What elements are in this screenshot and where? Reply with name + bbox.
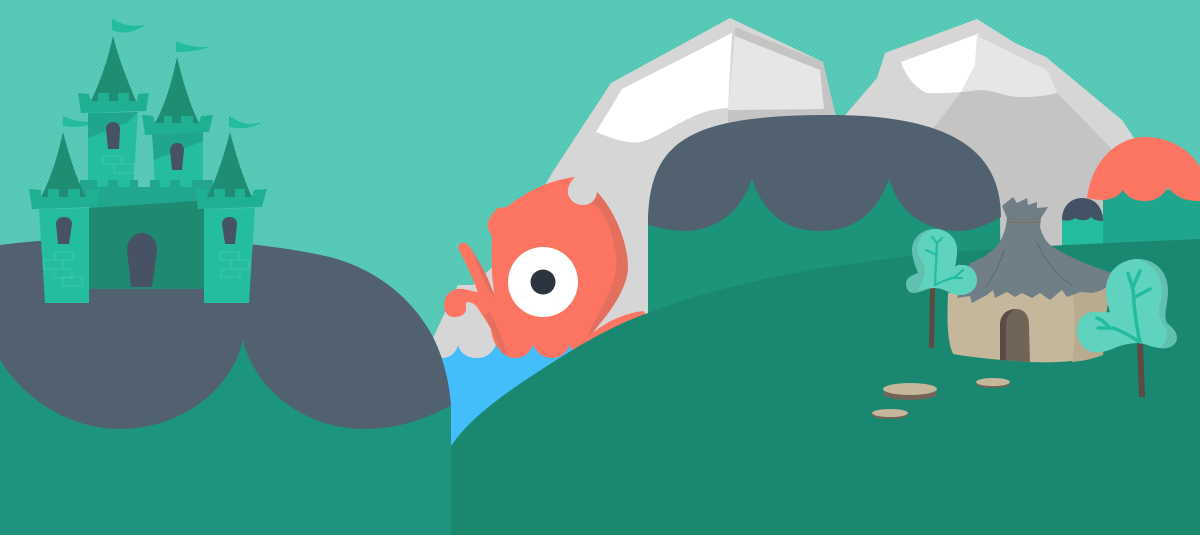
right front tower <box>195 132 267 303</box>
octopus eye white <box>508 247 578 317</box>
canopy shade <box>1077 259 1177 352</box>
hut <box>948 197 1112 362</box>
branches <box>1097 271 1150 342</box>
left mountain <box>433 18 860 350</box>
hut wall <box>948 280 1112 362</box>
octopus raised tentacle <box>458 243 500 315</box>
left green hill <box>0 300 451 535</box>
left tree <box>906 229 977 348</box>
left slate mound <box>0 238 451 429</box>
canopy <box>917 229 977 295</box>
trunk <box>929 288 935 348</box>
flags <box>63 19 262 128</box>
slate arch hill <box>648 115 1001 231</box>
octopus body <box>488 177 627 358</box>
central battlement <box>80 180 213 208</box>
castle <box>29 19 267 303</box>
medium stone <box>976 378 1010 388</box>
shaded tentacle edges <box>473 253 508 356</box>
coral dome building <box>1087 137 1200 250</box>
large stone <box>883 383 937 400</box>
hut wall shade <box>1072 280 1112 362</box>
octopus right tentacle <box>585 311 650 350</box>
small tower with dark dome <box>1062 198 1103 247</box>
octopus curled tentacle <box>444 289 520 353</box>
hut door <box>1000 309 1030 362</box>
right tree <box>1077 259 1177 397</box>
branches <box>926 237 963 285</box>
trunk <box>1137 343 1145 397</box>
green behind arch <box>648 170 1002 420</box>
roof creases <box>1007 218 1041 223</box>
back tower right <box>142 57 213 190</box>
water <box>436 335 600 450</box>
grey bite on the head <box>568 170 600 205</box>
left front tower <box>29 132 100 303</box>
central keep wall <box>89 200 204 289</box>
thatched roof <box>957 197 1112 303</box>
octopus shaded side <box>587 192 628 338</box>
back tower left <box>78 36 149 190</box>
right green foreground hill <box>451 239 1200 535</box>
hut door shade <box>1000 309 1016 360</box>
canopy <box>1077 259 1167 352</box>
rock scallops at the water line <box>433 285 500 358</box>
right mountain <box>840 19 1134 260</box>
octopus pupil <box>530 270 556 294</box>
octopus <box>444 170 650 358</box>
castle door <box>127 233 157 287</box>
tentacle sucker <box>619 321 633 331</box>
stepping stones <box>872 378 1010 419</box>
canopy shade <box>906 229 977 295</box>
small stone <box>872 409 908 419</box>
